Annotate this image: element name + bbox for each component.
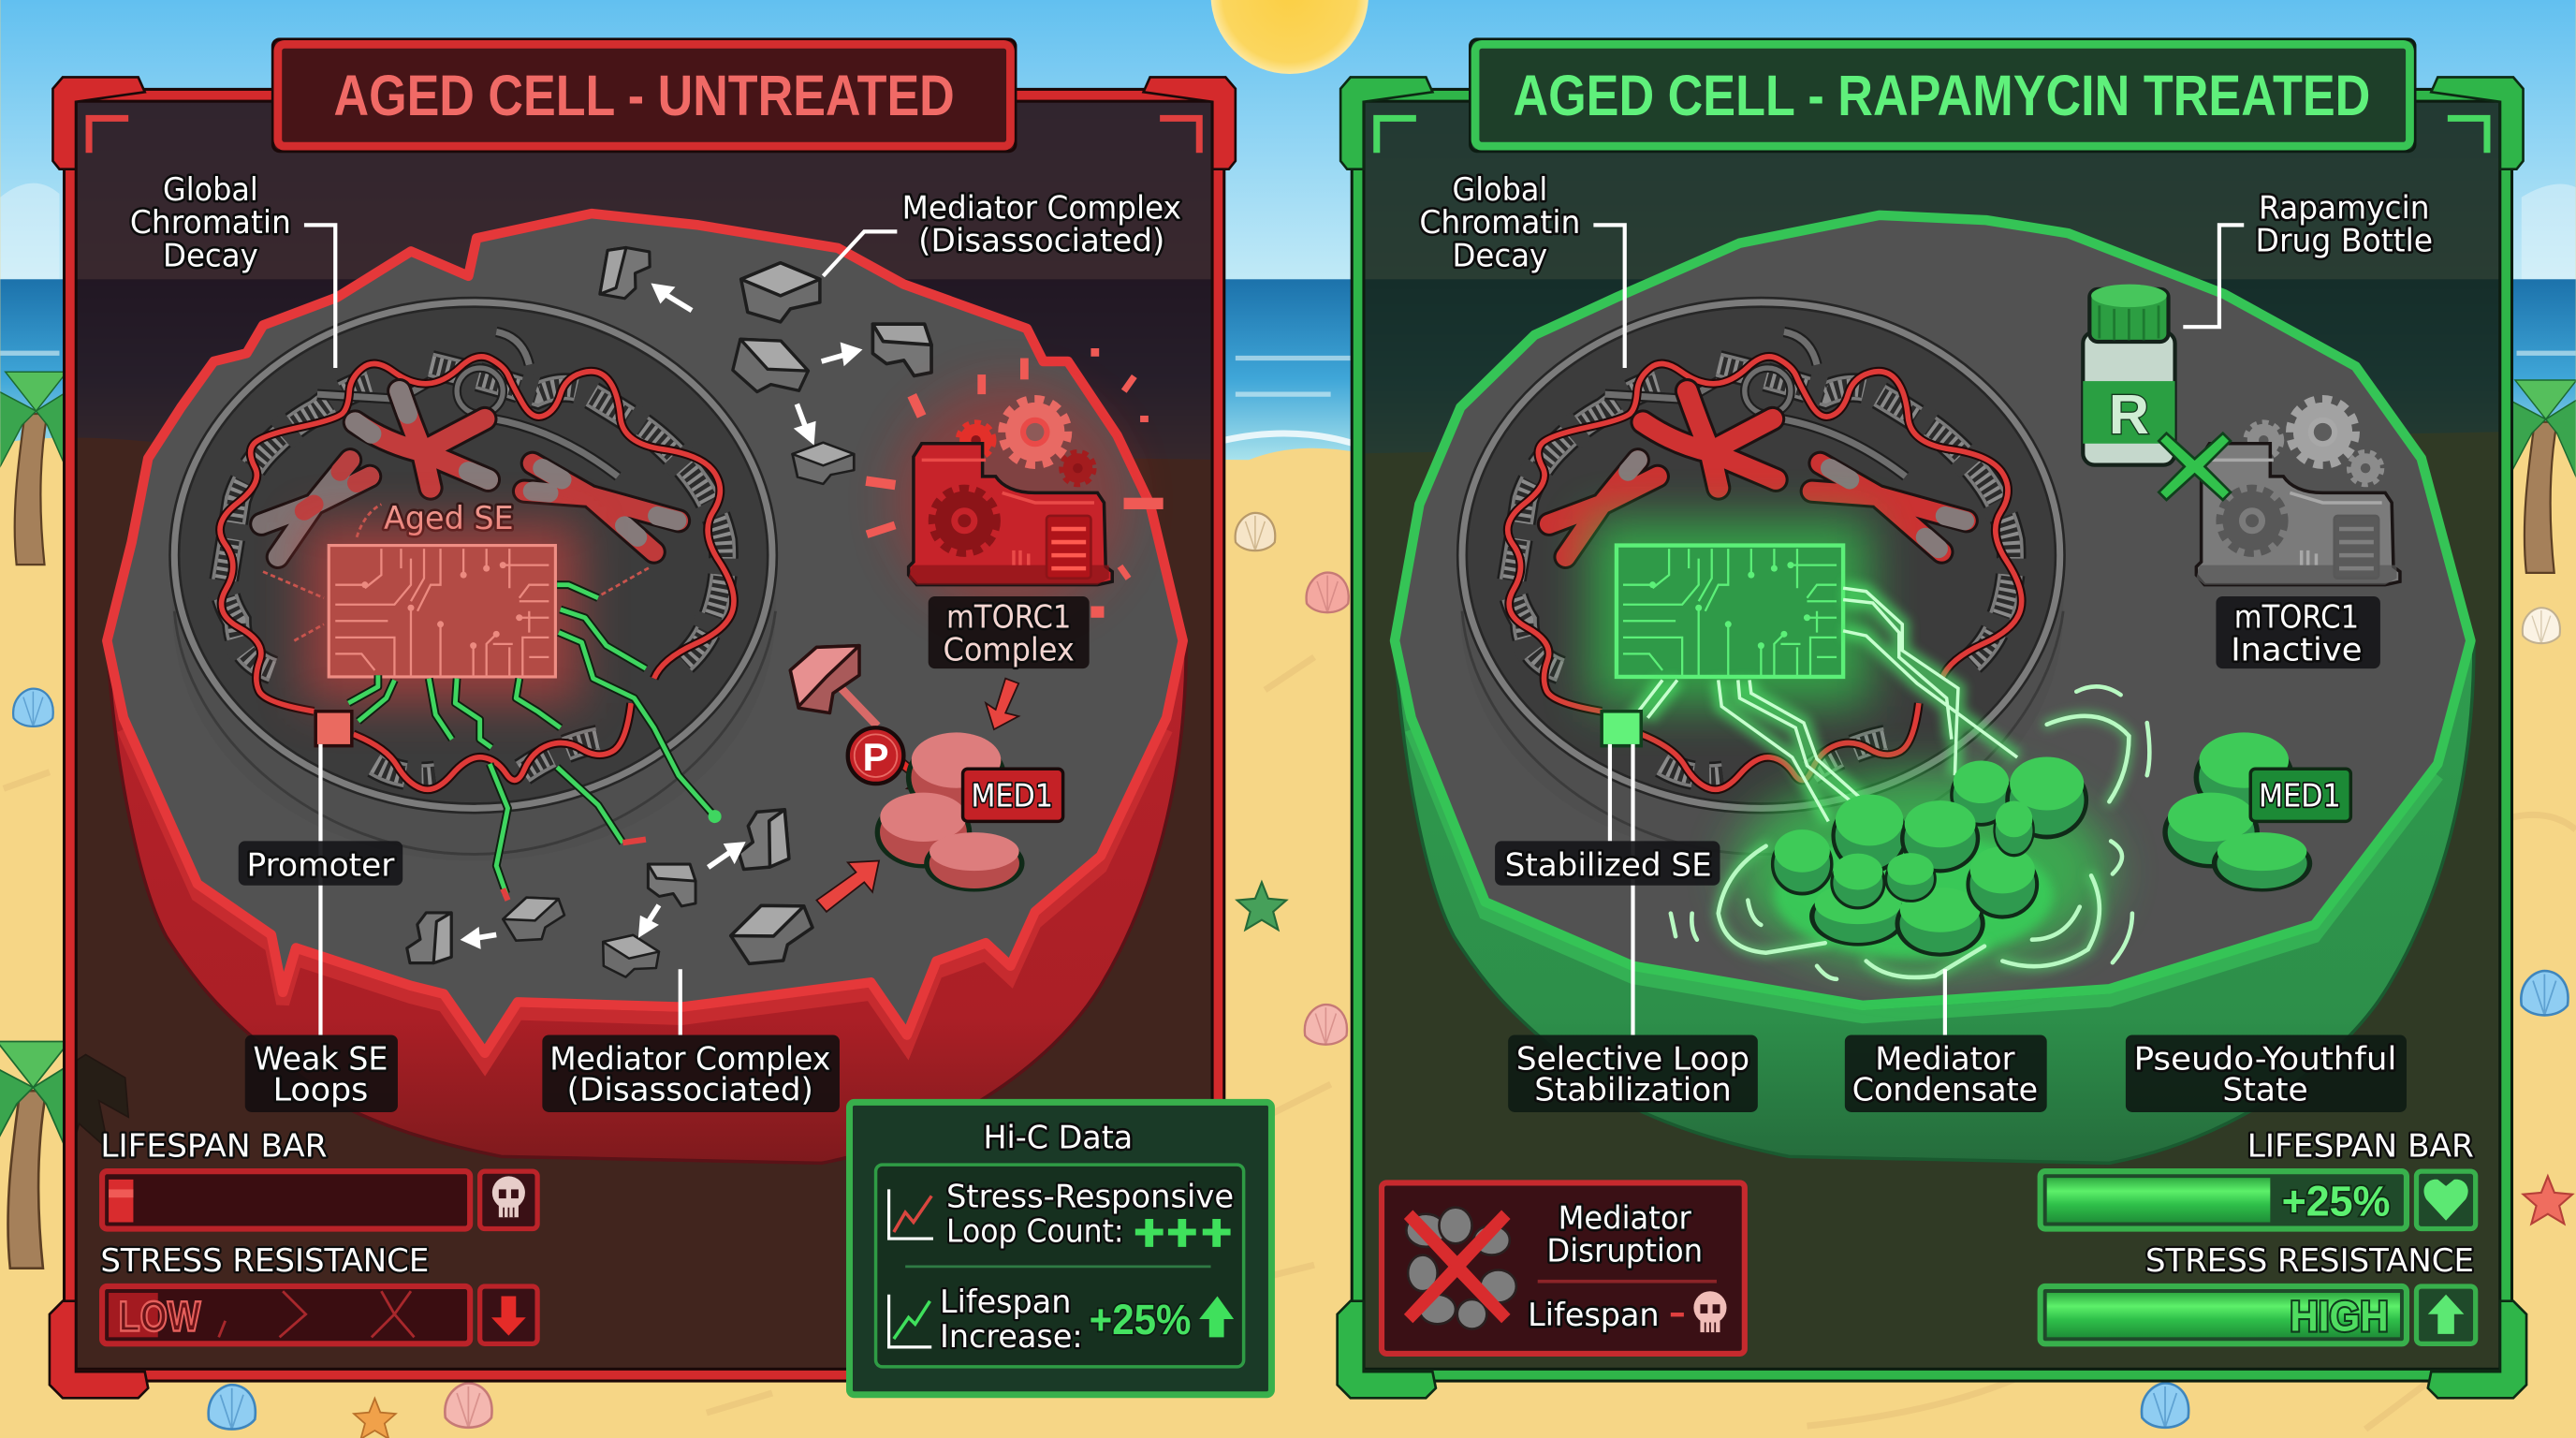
label: mTORC1 inactive — [2216, 596, 2380, 668]
chip: stabilized super enhancer — [1590, 519, 1869, 707]
title: rapamycin treated: AGED CELL - RAPAMYCIN TREATED — [1513, 64, 2370, 128]
chart: stress loop count — [889, 1189, 933, 1239]
label: global chromatin decay: Chromatin — [1419, 204, 1580, 242]
label: pseudo-youthful state — [2126, 1034, 2407, 1112]
panel: aged cell untreated — [50, 39, 1236, 1398]
panel: Hi-C data: +25% — [1090, 1296, 1191, 1343]
label: mediator complex top: Mediator Complex — [902, 189, 1181, 227]
chromatin loops: weak green — [348, 585, 722, 901]
label: MED1 — [2250, 769, 2350, 821]
label: mTORC1 complex — [929, 596, 1090, 668]
lifespan bar: low: LIFESPAN BAR — [100, 1127, 327, 1165]
bottle: rapamycin: R — [2109, 383, 2149, 446]
chromosomes — [1549, 391, 1967, 557]
label: weak SE loops: Weak SE — [254, 1040, 388, 1078]
label: mediator condensate: Mediator — [1875, 1040, 2015, 1078]
chromosomes — [261, 391, 679, 557]
icon: sun — [1211, 0, 1368, 74]
label: global chromatin decay: Global — [163, 171, 258, 209]
label: mTORC1 complex: mTORC1 — [946, 598, 1071, 636]
MED1 cluster — [877, 732, 1022, 890]
nucleus with chromatin — [173, 298, 776, 860]
label: selective loop stabilization — [1508, 1034, 1758, 1112]
label: mTORC1 complex: Complex — [944, 631, 1075, 668]
label: pseudo-youthful state: State — [2222, 1072, 2308, 1109]
stress resistance bar: low: STRESS RESISTANCE — [100, 1242, 429, 1280]
plus signs — [1135, 1219, 1231, 1247]
label: global chromatin decay: Global — [1452, 171, 1547, 209]
label: global chromatin decay — [1419, 171, 1625, 368]
label: rapamycin drug bottle: Drug Bottle — [2256, 222, 2433, 259]
panel: Hi-C data: Lifespan — [940, 1284, 1071, 1321]
cell body and damaged membrane — [107, 213, 1186, 1163]
lifespan bar: high — [2041, 1127, 2476, 1229]
callout: mediator disruption: Lifespan — [1528, 1297, 1660, 1334]
label: mediator complex bottom: (Disassociated) — [567, 1072, 813, 1109]
panel: aged cell rapamycin treated — [1338, 39, 2526, 1398]
label: selective loop stabilization: Stabilization — [1534, 1072, 1732, 1109]
label: weak SE loops: Loops — [273, 1072, 368, 1109]
chart: lifespan increase — [889, 1295, 931, 1347]
label: global chromatin decay: Decay — [1452, 237, 1547, 274]
label: mediator complex top: (Disassociated) — [918, 222, 1164, 259]
MED1 cluster — [2165, 732, 2309, 890]
bottle: rapamycin — [2083, 285, 2175, 465]
label: stabilized SE: Stabilized SE — [1505, 846, 1712, 884]
nucleus with chromatin — [1460, 298, 2063, 860]
label: global chromatin decay: Chromatin — [130, 204, 291, 242]
panel frame — [50, 77, 1236, 1398]
icon: phosphate — [848, 727, 903, 784]
panel: Hi-C data — [849, 1102, 1271, 1395]
callout: mediator disruption — [1382, 1182, 1745, 1354]
title: untreated — [273, 39, 1016, 151]
promoter marker — [1602, 712, 1641, 746]
label: rapamycin drug bottle — [2183, 189, 2433, 327]
label: mediator condensate: Condensate — [1852, 1072, 2038, 1109]
stress resistance bar: low: LOW — [119, 1292, 200, 1340]
icon: crossed mediator — [1406, 1208, 1516, 1329]
chip: aged super enhancer — [263, 505, 651, 703]
icon: beach shells and starfish — [13, 513, 2572, 1438]
label: mTORC1 inactive: mTORC1 — [2234, 598, 2359, 636]
label: MED1 — [963, 769, 1063, 821]
label: pseudo-youthful state: Pseudo-Youthful — [2134, 1040, 2396, 1078]
promoter marker — [315, 712, 352, 746]
lifespan bar: high: +25% — [2282, 1177, 2390, 1225]
label: selective loop stabilization: Selective Loop — [1516, 1040, 1749, 1078]
icon: up arrow — [1199, 1296, 1234, 1337]
label: rapamycin drug bottle: Rapamycin — [2259, 189, 2430, 227]
label: promoter: Promoter — [247, 846, 395, 884]
label: promoter — [239, 744, 402, 1034]
text: aged SE: Aged SE — [384, 500, 514, 537]
icon: phosphate: P — [863, 735, 889, 779]
title: untreated: AGED CELL - UNTREATED — [334, 64, 955, 128]
arrows: fragments drifting apart — [461, 285, 861, 947]
panel: Hi-C data: Hi-C Data — [983, 1120, 1133, 1157]
icon: green inhibition X — [2159, 433, 2231, 500]
stress resistance bar: low — [100, 1242, 537, 1343]
lifespan bar: high: LIFESPAN BAR — [2247, 1127, 2474, 1165]
mediator fragments — [407, 244, 931, 982]
callout: mediator disruption: Disruption — [1546, 1233, 1703, 1270]
label: mTORC1 inactive: Inactive — [2231, 631, 2363, 668]
panel: Hi-C data: Loop Count: — [946, 1213, 1124, 1251]
label: MED1: MED1 — [2259, 778, 2341, 815]
callout: mediator disruption: Mediator — [1559, 1200, 1692, 1238]
title: rapamycin treated — [1471, 39, 2415, 151]
label: global chromatin decay — [130, 171, 335, 368]
label: mediator complex bottom: Mediator Complex — [549, 1040, 830, 1078]
label: MED1: MED1 — [971, 778, 1053, 815]
icon: palm trees — [0, 372, 2576, 1269]
label: mediator condensate — [1845, 969, 2047, 1112]
stress resistance bar: high — [2041, 1242, 2476, 1343]
mTORC1 machine, inactive — [2196, 401, 2400, 585]
stress resistance bar: high: STRESS RESISTANCE — [2145, 1242, 2474, 1280]
stress resistance bar: high: HIGH — [2290, 1292, 2389, 1340]
mTORC1 machine, active — [865, 348, 1164, 620]
label: weak SE loops — [245, 1034, 398, 1112]
mediator condensate with glow — [1630, 588, 2149, 979]
panel: Hi-C data: Stress-Responsive — [946, 1179, 1234, 1216]
red arrows into MED1 — [816, 679, 1018, 912]
lifespan bar: low — [100, 1127, 537, 1229]
label: mediator complex top — [823, 189, 1181, 276]
panel frame — [1338, 77, 2526, 1398]
label: mediator complex bottom — [542, 969, 840, 1112]
label: global chromatin decay: Decay — [163, 237, 258, 274]
panel: Hi-C data: Increase: — [940, 1318, 1083, 1356]
cell body and healthy membrane — [1395, 215, 2474, 1163]
mediator fragment: salmon — [790, 646, 877, 726]
label: stabilized SE — [1495, 744, 1720, 1034]
